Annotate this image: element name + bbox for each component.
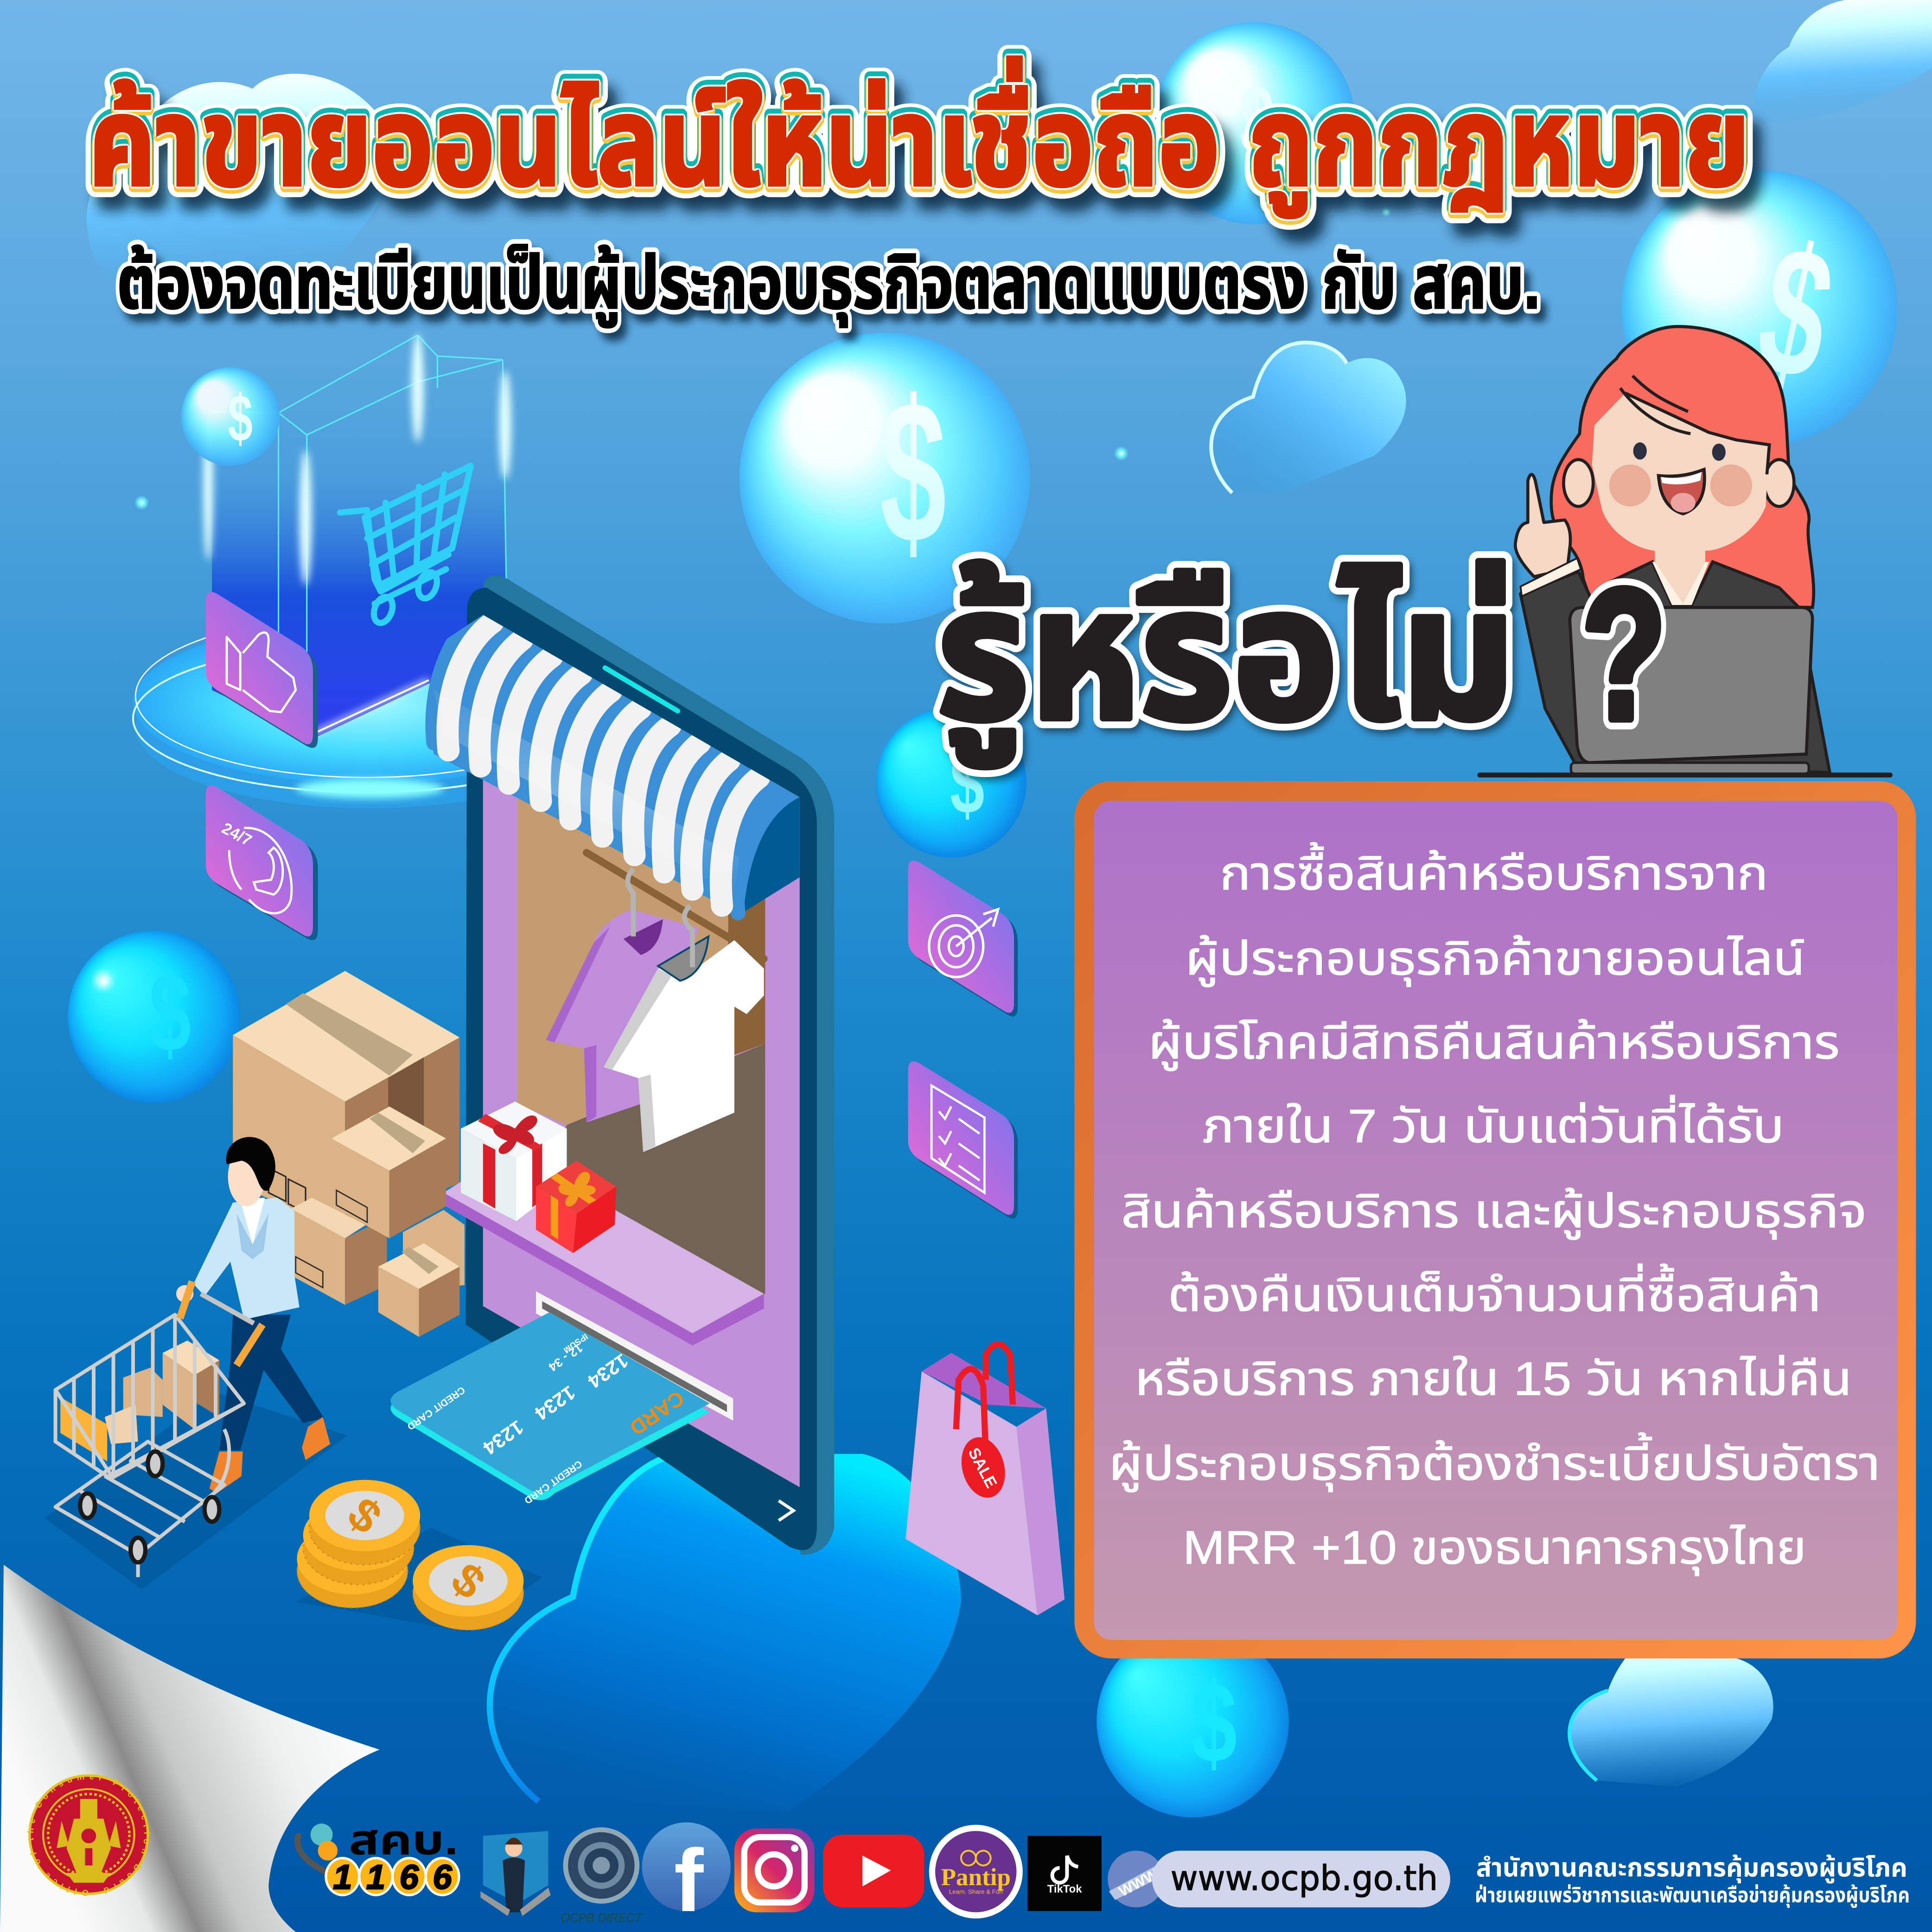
icon: instagram: [734, 1829, 815, 1912]
cart goods: [105, 1340, 219, 1444]
credit card: 12 - 34: [546, 1341, 586, 1374]
rod: [587, 853, 764, 959]
shopping bag: [905, 1344, 1065, 1615]
jacket: [1520, 562, 1830, 772]
panel: consumer rights text: [1074, 781, 1916, 1658]
panel text: สินค้าหรือบริการ และผู้ประกอบธุรกิจ: [1121, 1186, 1867, 1240]
bubble: top right: [1621, 170, 1898, 446]
subtitle: ต้องจดทะเบียนเป็นผู้ประกอบธุรกิจตลาดแบบตรง กับ สคบ.: [117, 241, 1540, 328]
sphere: small dollar on box: [181, 367, 280, 466]
sparkles: [134, 207, 1391, 510]
eyes: [1633, 442, 1726, 461]
panel text: ภายใน 7 วัน นับแต่วันที่ได้รับ: [1203, 1095, 1784, 1153]
red gift: [536, 1160, 616, 1253]
neck: [1655, 542, 1705, 604]
tile: target: [908, 861, 1018, 1016]
table line: [1477, 772, 1893, 778]
hotline digits: 1: [366, 1858, 385, 1896]
hotline digits: 6: [433, 1858, 452, 1896]
credit card: CREDIT CARD: [522, 1458, 584, 1506]
single coin: [413, 1545, 523, 1630]
hotline digits: 1: [333, 1858, 352, 1896]
white gift: [461, 1102, 567, 1221]
icon: facebook: f: [674, 1831, 704, 1930]
shopper woman: [176, 1137, 330, 1493]
raised hand: [1515, 474, 1570, 577]
shopping cart: [56, 1282, 262, 1577]
icon: www globe: WWW: [1116, 1865, 1161, 1900]
tile: 24/7 phone: 24/7: [219, 819, 255, 849]
logo: OCPB rings: OCPB DIRECT: [561, 1911, 643, 1925]
credit card: 1234: [530, 1381, 579, 1424]
blouse: [1652, 562, 1709, 605]
icon: www globe: [1108, 1851, 1164, 1907]
panel text: การซื้อสินค้าหรือบริการจาก: [1220, 842, 1768, 900]
big box: [233, 971, 459, 1232]
hologram shopping box: [133, 334, 604, 808]
sphere: small dollar on box: $: [228, 381, 253, 455]
cloud: middle: [1211, 343, 1406, 493]
subtitle: ต้องจดทะเบียนเป็นผู้ประกอบธุรกิจตลาดแบบตรง กับ สคบ.: [117, 241, 1540, 328]
panel text: ต้องคืนเงินเต็มจำนวนที่ซื้อสินค้า: [1168, 1264, 1821, 1321]
legs: [219, 1315, 324, 1450]
credit card: 1234: [584, 1349, 632, 1392]
hands: [176, 1285, 193, 1302]
bubble: left cyan: $: [149, 950, 191, 1075]
bubble: top centre: $: [1239, 65, 1274, 175]
screen: [483, 628, 800, 1487]
bubble: small under headline: [876, 707, 1027, 858]
credit card: [390, 1312, 710, 1506]
purple shirt: [546, 869, 699, 1122]
bubble: top centre: [1153, 22, 1355, 224]
logo: OCPB direct mascot: [480, 1831, 551, 1916]
hotline digits: 6: [400, 1858, 419, 1896]
bubble: bottom centre: $: [1190, 1659, 1237, 1786]
back box: [403, 1210, 465, 1291]
card slot: [536, 1291, 733, 1421]
headline: did you know: รู้หรือไม่: [940, 556, 1519, 772]
page curl: [0, 1565, 380, 1932]
jacket: [193, 1198, 300, 1320]
bubble: large dollar: $: [880, 358, 946, 585]
shoes: [210, 1417, 330, 1493]
logo: hotline 1166: สคบ.: [349, 1817, 459, 1864]
cloud: top right corner: [1750, 0, 1932, 123]
bubble: left cyan: [68, 930, 240, 1103]
icon: facebook: [642, 1822, 731, 1930]
coin stack: $: [338, 1487, 391, 1544]
headline: did you know: รู้หรือไม่: [937, 551, 1516, 767]
floor: [517, 1044, 765, 1333]
coins: [297, 1480, 523, 1630]
logo: consumer protection board seal: Office of the Consumer Protection Board: [26, 1771, 152, 1898]
phone side: [483, 575, 834, 1555]
icon: pantip: [929, 1825, 1023, 1919]
hair: [1551, 326, 1814, 607]
tile: checklist: [908, 1061, 1018, 1218]
small box: [378, 1243, 459, 1337]
ears: [1563, 459, 1794, 506]
logo: hotline 1166: [298, 1817, 459, 1896]
right wall: [728, 850, 765, 1057]
website pill: [1152, 1851, 1450, 1907]
shopping bag: SALE: [964, 1445, 1000, 1491]
shelf: [444, 1146, 764, 1345]
tile: thumbs up: [206, 592, 318, 748]
panel text: MRR +10 ของธนาคารกรุงไทย: [1183, 1522, 1806, 1575]
back wall: [517, 690, 728, 1125]
headline: did you know: ?: [1582, 551, 1666, 758]
bubble: bottom centre: [1097, 1625, 1289, 1817]
glow columns: [203, 334, 511, 585]
cloud: top left: [87, 74, 394, 296]
headline: did you know: ?: [1582, 551, 1666, 758]
phone store: [429, 575, 834, 1555]
chevron: [779, 1501, 793, 1520]
panel text: ผู้ประกอบธุรกิจค้าขายออนไลน์: [1186, 933, 1805, 987]
icon: cart: [340, 466, 471, 625]
gloss band: [434, 690, 740, 894]
credit card: CREDIT CARD: [405, 1384, 467, 1432]
credit card: CARD: [625, 1386, 689, 1440]
girl with laptop: [1477, 326, 1893, 778]
awning: [429, 615, 800, 914]
head: [226, 1137, 275, 1206]
credit card: 1234: [479, 1416, 527, 1459]
icon: pantip: Pantip: [941, 1864, 1011, 1891]
holo body: [212, 360, 506, 740]
bubble: large dollar: [740, 333, 1030, 624]
phone front: [466, 588, 817, 1550]
cuff: [1520, 558, 1581, 596]
cart handles: [180, 1282, 262, 1365]
cloud: bottom right: [1569, 1632, 1773, 1786]
website pill: www.ocpb.go.th: [1171, 1858, 1438, 1899]
icon: pantip: Learn. Share & Fun: [949, 1888, 1003, 1895]
cheeks: [1609, 465, 1752, 506]
bubble: top right: $: [1743, 205, 1849, 420]
panel text: ผู้ประกอบธุรกิจต้องชำระเบี้ยปรับอัตรา: [1109, 1433, 1880, 1492]
subtitle: ต้องจดทะเบียนเป็นผู้ประกอบธุรกิจตลาดแบบตรง กับ สคบ.: [123, 250, 1546, 337]
floor shadows: [45, 1392, 542, 1632]
bubble: small under headline: $: [950, 736, 984, 832]
coin stack: [297, 1480, 420, 1608]
icon: youtube: [823, 1835, 924, 1907]
platform rings: [133, 615, 604, 808]
agency name: [1475, 1853, 1910, 1908]
laptop: [1570, 607, 1812, 774]
single coin: $: [441, 1553, 495, 1609]
tile: 24/7 phone: [206, 785, 318, 940]
icon: tiktok: [1027, 1836, 1102, 1911]
icon: tiktok: TikTok: [1047, 1883, 1082, 1895]
middle box: [332, 1106, 446, 1238]
agency name: สำนักงานคณะกรรมการคุ้มครองผู้บริโภค: [1476, 1853, 1907, 1883]
credit card: IPSUM: [562, 1332, 590, 1355]
face: [1592, 393, 1769, 551]
headline: did you know: รู้หรือไม่: [937, 551, 1516, 767]
panel text: หรือบริการ ภายใน 15 วัน หากไม่คืน: [1135, 1353, 1852, 1405]
logo: OCPB rings: [561, 1827, 643, 1925]
large cloud behind phone: [490, 1454, 961, 1811]
gifts: [461, 1102, 616, 1253]
wire frame: [210, 335, 506, 714]
white shirt: [604, 905, 764, 1152]
hotline digits: [326, 1858, 459, 1896]
lower box: [291, 1198, 387, 1305]
speaker line: [605, 668, 678, 711]
cardboard boxes: [233, 971, 465, 1337]
panel text: [1109, 842, 1880, 1575]
glow edge: [312, 680, 429, 734]
collar: [240, 1198, 265, 1244]
wheels: [80, 1452, 219, 1562]
mouth: [1658, 470, 1704, 514]
seal emblem: [57, 1799, 121, 1883]
panel text: ผู้บริโภคมีสิทธิคืนสินค้าหรือบริการ: [1148, 1017, 1840, 1071]
